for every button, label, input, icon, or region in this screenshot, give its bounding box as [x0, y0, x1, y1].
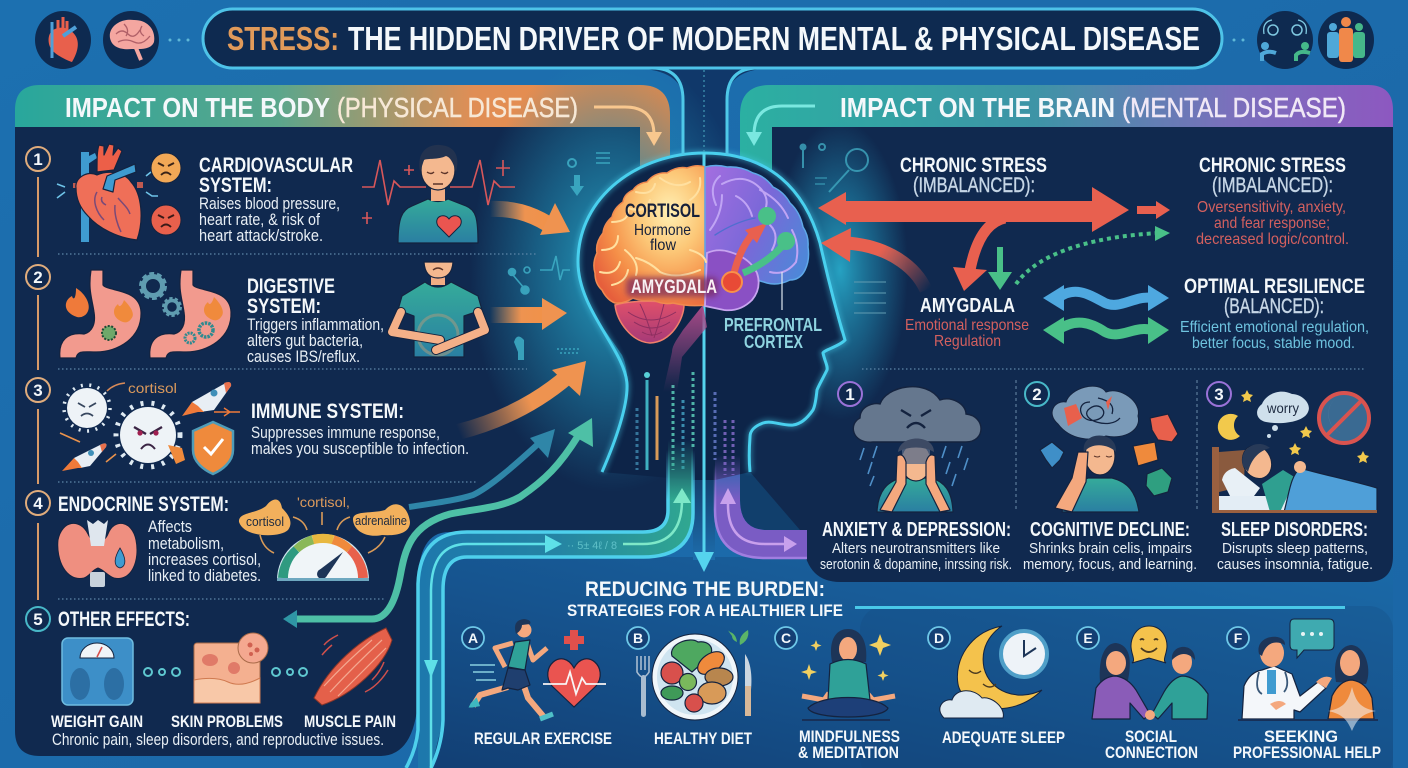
text: endocrine body [148, 517, 261, 585]
connector lines: top [628, 68, 816, 155]
badge F: F [1234, 630, 1243, 646]
text: digestive: alters gut bacteria, [247, 331, 363, 350]
brain: pathways [732, 223, 785, 282]
central strip [693, 440, 715, 560]
panel: body [15, 127, 693, 756]
arrow: central vertical [694, 153, 714, 572]
heading: brain [840, 92, 1346, 123]
icon: gears [142, 274, 180, 315]
badge: mental 2 [1025, 382, 1049, 406]
text: chronic stress left [900, 154, 1047, 197]
neck channel above head [628, 68, 776, 160]
badge: mental 3: 3 [1214, 385, 1224, 404]
text: digestive: SYSTEM: [247, 295, 321, 318]
icon: decorative teal glyphs [508, 153, 610, 360]
text: digestive: Triggers inflammation, [247, 315, 384, 334]
label: regular exercise: REGULAR EXERCISE [474, 729, 612, 748]
text: other effects labels: SKIN PROBLEMS [171, 712, 283, 731]
text: chronic stress right [1196, 154, 1349, 248]
heading: body [65, 92, 578, 123]
icon: puzzle pieces [1040, 414, 1178, 496]
badge A: A [468, 630, 478, 646]
text: cortisol label [625, 201, 700, 254]
icon: virus small [64, 385, 110, 431]
icon: crescent and stars [1218, 390, 1369, 463]
label: cortisol above gauge: 'cortisol, [297, 494, 350, 510]
brain: node top [758, 207, 776, 225]
label: connector flow code: ·· 5± 4ℓ / 8 [567, 540, 617, 552]
icon: people badge [1318, 11, 1374, 69]
arrow head: body band [646, 132, 662, 146]
arrow: down on lower-left connector [424, 660, 438, 678]
icon: moon clock cloud [940, 626, 1047, 718]
badge: mental 3 [1207, 382, 1231, 406]
text: sleep disorders: Disrupts sleep patterns, [1222, 540, 1368, 557]
arrow: other effects up to brain [283, 418, 593, 628]
data strip decoration [637, 372, 733, 475]
arrow: red double arrow [818, 187, 1129, 232]
text: optimal resilience: (BALANCED): [1224, 295, 1324, 318]
blob: adrenaline [353, 504, 410, 536]
dotted midline above head [703, 70, 705, 152]
wedge under the jaw [740, 470, 800, 530]
gauge connector arrows [260, 512, 385, 553]
magnifier decoration [800, 144, 868, 192]
ground line under doctor [1238, 719, 1378, 721]
text: chronic stress right: CHRONIC STRESS [1199, 154, 1346, 177]
label: healthy diet: HEALTHY DIET [654, 729, 752, 748]
text: optimal resilience [1180, 275, 1369, 352]
text: cortisol label: Hormone [634, 222, 691, 239]
icon: storm cloud person [853, 387, 981, 512]
number badge 1 [26, 147, 50, 171]
text: cognitive: Shrinks brain celis, impairs [1029, 540, 1192, 557]
brain: temporal lobe [705, 250, 759, 310]
icon: stomach right [150, 270, 231, 358]
sparkle watermark [1328, 687, 1376, 731]
badge: mental 1 [838, 382, 862, 406]
icon: meditation [801, 629, 895, 720]
arrow head: brain band [746, 132, 762, 146]
heading rule [855, 606, 1345, 609]
icon: doctor [1242, 637, 1332, 719]
badge F [1227, 627, 1249, 649]
text: other effects heading: OTHER EFFECTS: [58, 608, 190, 631]
text: cognitive: COGNITIVE DECLINE: [1030, 519, 1190, 541]
text: amygdala: Emotional response [905, 317, 1029, 334]
number badge 4: 4 [33, 494, 43, 513]
text: amygdala: Regulation [934, 333, 1001, 350]
text: anxiety: Alters neurotransmitters like [832, 540, 1000, 557]
arrow: cardiovascular to brain [490, 203, 570, 235]
data strip: pin and bars [644, 372, 657, 470]
icon: red plus [564, 630, 584, 650]
icon: skin sample [194, 633, 268, 703]
band: brain header [740, 85, 1393, 175]
text: cardiovascular: SYSTEM: [199, 174, 272, 197]
number badge 4 [26, 491, 50, 515]
title banner: THE HIDDEN DRIVER OF MODERN MENTAL & PHYSICAL DISEASE [348, 20, 1200, 57]
label: social connection [1105, 727, 1198, 762]
icon: ECG line [362, 160, 515, 224]
decor: lines left of amygdala [854, 282, 886, 313]
text: sleep disorders [1217, 519, 1373, 573]
icon: stomach left [60, 270, 141, 358]
label: seeking help: SEEKING [1264, 727, 1338, 746]
blob: cortisol: cortisol [246, 514, 284, 529]
glow left of head [470, 48, 754, 492]
text: endocrine body: metabolism, [148, 534, 224, 553]
arrow: red branch down [953, 218, 1005, 291]
dots between scale and skin [144, 668, 180, 676]
text: endocrine body: Affects [148, 517, 192, 536]
badge D [928, 627, 950, 649]
number badge 2: 2 [33, 268, 43, 287]
badge C [775, 627, 797, 649]
number badge 3 [26, 378, 50, 402]
text: cardiovascular [199, 154, 353, 245]
text: endocrine heading: ENDOCRINE SYSTEM: [58, 493, 229, 516]
text: other effects labels: WEIGHT GAIN [51, 712, 143, 731]
panel: strategies inner backdrop [860, 606, 1393, 768]
heading: reducing the burden [567, 578, 843, 620]
icon: plate and cutlery [637, 630, 751, 720]
head outline [578, 153, 845, 472]
label: cortisol near virus: cortisol [128, 380, 177, 396]
number badge 5: 5 [33, 610, 43, 629]
brain: amygdala dot [722, 272, 742, 292]
squiggle near cortisol [107, 383, 125, 391]
teal band fade up [668, 440, 693, 500]
icon: person with heart [398, 145, 478, 243]
icon: heart with pulse [543, 659, 606, 707]
purple connector band [715, 500, 807, 558]
icon: brain badge [103, 11, 159, 69]
dotted dividers [58, 254, 1366, 599]
arrow: dotted green [1016, 226, 1170, 284]
text: other effects labels: MUSCLE PAIN [304, 712, 396, 731]
text: prefrontal cortex [724, 315, 822, 352]
number badge 5 [26, 607, 50, 631]
icon: social connection [1092, 626, 1208, 720]
text: prefrontal cortex: CORTEX [744, 332, 803, 352]
teal connector band [406, 500, 693, 768]
arrow: small red [1137, 201, 1170, 219]
label: mindfulness: & MEDITATION [798, 743, 899, 762]
arrow: digestive to brain [490, 298, 567, 330]
text: cardiovascular: heart attack/stroke. [199, 226, 323, 245]
badge B: B [633, 630, 643, 646]
badge: mental 1: 1 [845, 385, 855, 404]
text: chronic stress right: (IMBALANCED): [1212, 174, 1333, 197]
icon: support badge [1257, 11, 1313, 69]
dashed separators [1016, 380, 1197, 510]
badge E: E [1083, 630, 1093, 646]
icon: no-moon sign [1319, 393, 1369, 443]
label: adequate sleep: ADEQUATE SLEEP [942, 728, 1065, 747]
text: anxiety: serotonin & dopamine, inrssing risk. [820, 556, 1012, 573]
heading: reducing the burden: REDUCING THE BURDEN: [585, 578, 825, 601]
dots: left of title [168, 38, 190, 42]
glow right of head [772, 120, 908, 420]
text: immune: makes you susceptible to infection. [251, 439, 469, 458]
brain: pointer to prefrontal [781, 272, 783, 310]
text: other effects labels: Chronic pain, sleep disorders, and reproductive issues. [52, 730, 384, 749]
label: seeking help [1233, 727, 1381, 762]
text: immune [251, 400, 469, 458]
text: digestive: DIGESTIVE [247, 275, 335, 298]
text: endocrine body: linked to diabetes. [148, 566, 261, 585]
arrow: blue wave [1043, 285, 1169, 311]
brain: amygdala band [626, 277, 718, 297]
arrow: green wave [1043, 317, 1169, 344]
title banner [203, 9, 1222, 68]
text: chronic stress right: and fear response; [1214, 215, 1330, 232]
text: immune: IMMUNE SYSTEM: [251, 400, 404, 423]
panel: reducing the burden background [431, 557, 1393, 768]
icon: angry face orange [151, 153, 181, 183]
icon: runner [470, 619, 553, 719]
number badge 2 [26, 265, 50, 289]
text: cardiovascular: heart rate, & risk of [199, 210, 320, 229]
arrow: red curve to brain [821, 228, 926, 290]
icon: sleeper in bed [1212, 441, 1377, 513]
label: social connection: SOCIAL [1125, 727, 1177, 746]
heading: brain: IMPACT ON THE BRAIN [840, 92, 1115, 123]
brain: node right [777, 232, 795, 250]
arrow: immune to brain [458, 361, 586, 432]
icon: worry bubble: worry [1266, 400, 1299, 416]
heading: brain: (MENTAL DISEASE) [1122, 92, 1346, 123]
text: endocrine body: increases cortisol, [148, 550, 261, 569]
icon: patient [1328, 645, 1374, 719]
badge D: D [934, 630, 944, 646]
text: chronic stress right: decreased logic/control. [1196, 231, 1349, 248]
blob: cortisol [239, 500, 290, 535]
connector lines: teal band edges [406, 447, 693, 768]
label: mindfulness: MINDFULNESS [799, 727, 900, 746]
label: mindfulness [798, 727, 900, 762]
brain: right hemisphere [705, 166, 809, 305]
arrow: green down [988, 247, 1012, 290]
label: social connection: CONNECTION [1105, 743, 1198, 762]
text: anxiety [820, 519, 1012, 573]
icon: weight scale [62, 638, 133, 705]
timeline rail [37, 177, 39, 600]
arrow: purple inner loop [720, 488, 797, 552]
number badge 3: 3 [33, 381, 43, 400]
text: optimal resilience: Efficient emotional regulation, [1180, 319, 1369, 336]
brain: stem [663, 305, 707, 392]
icon: heart badge [35, 11, 91, 69]
purple band outer edge [715, 465, 807, 558]
title banner: STRESS: [227, 20, 339, 57]
icon: speech bubble [1290, 619, 1334, 658]
text: chronic stress left: CHRONIC STRESS [900, 154, 1047, 177]
band: body header [15, 85, 670, 175]
dots between skin and muscle [272, 668, 307, 676]
text: amygdala [905, 295, 1029, 350]
icon: gauge [277, 534, 369, 581]
text: amygdala on brain: AMYGDALA [631, 277, 717, 298]
icon: person holding stomach [392, 262, 485, 357]
icon: virus large [116, 403, 185, 467]
icon: muscle [314, 628, 392, 705]
brain: left hemisphere [594, 166, 705, 306]
text: cortisol label: flow [650, 237, 676, 254]
icon: thyroid [58, 520, 137, 587]
icon: tangled thought person [1052, 386, 1139, 512]
text: chronic stress left: (IMBALANCED): [913, 174, 1035, 197]
text: anxiety: ANXIETY & DEPRESSION: [822, 519, 1011, 541]
purple band fade up [715, 455, 740, 500]
icon: shield [193, 422, 233, 474]
badge B [627, 627, 649, 649]
blob: adrenaline: adrenaline [355, 513, 407, 528]
text: digestive: causes IBS/reflux. [247, 347, 360, 366]
text: chronic stress right: Oversensitivity, anxiety, [1197, 199, 1346, 216]
flames [66, 288, 223, 322]
badge: mental 2: 2 [1032, 385, 1042, 404]
text: cardiovascular: Raises blood pressure, [199, 194, 340, 213]
heading: body: IMPACT ON THE BODY [65, 92, 330, 123]
text: sleep disorders: causes insomnia, fatigue. [1217, 556, 1373, 573]
heading: body: (PHYSICAL DISEASE) [337, 92, 578, 123]
panel: brain [715, 127, 1393, 582]
badge E [1077, 627, 1099, 649]
badge C: C [781, 630, 791, 646]
icon: worry bubble [1257, 392, 1309, 438]
icon: anatomical heart [57, 144, 158, 242]
dots: right of title [1232, 38, 1244, 42]
text: optimal resilience: OPTIMAL RESILIENCE [1184, 275, 1365, 298]
text: amygdala: AMYGDALA [920, 295, 1015, 317]
text: prefrontal cortex: PREFRONTAL [724, 315, 822, 335]
text: cognitive [1023, 519, 1197, 573]
text: cortisol label: CORTISOL [625, 201, 700, 222]
text: optimal resilience: better focus, stable mood. [1192, 335, 1355, 352]
brain: cerebellum [615, 301, 684, 343]
text: other effects labels [51, 712, 396, 749]
arrow: brain band [754, 106, 815, 135]
icon: rocket top [182, 382, 240, 416]
text: digestive [247, 275, 384, 366]
connector line: middle with arrows [431, 500, 682, 768]
heading: reducing the burden: STRATEGIES FOR A HEALTHIER LIFE [567, 601, 843, 620]
brain: folds [600, 176, 797, 285]
text: immune: Suppresses immune response, [251, 423, 440, 442]
number badge 1: 1 [33, 150, 43, 169]
badge A [462, 627, 484, 649]
arrow: teal up on connector [673, 488, 691, 503]
icon: rocket bottom [60, 433, 116, 471]
arrow: endocrine to brain [409, 429, 555, 507]
arrow: flow right on connector [545, 535, 562, 553]
head silhouette [578, 153, 845, 480]
text: cardiovascular: CARDIOVASCULAR [199, 154, 353, 177]
icon: angry face red [151, 205, 181, 235]
text: cognitive: memory, focus, and learning. [1023, 556, 1197, 573]
arrow: body band [594, 107, 654, 135]
